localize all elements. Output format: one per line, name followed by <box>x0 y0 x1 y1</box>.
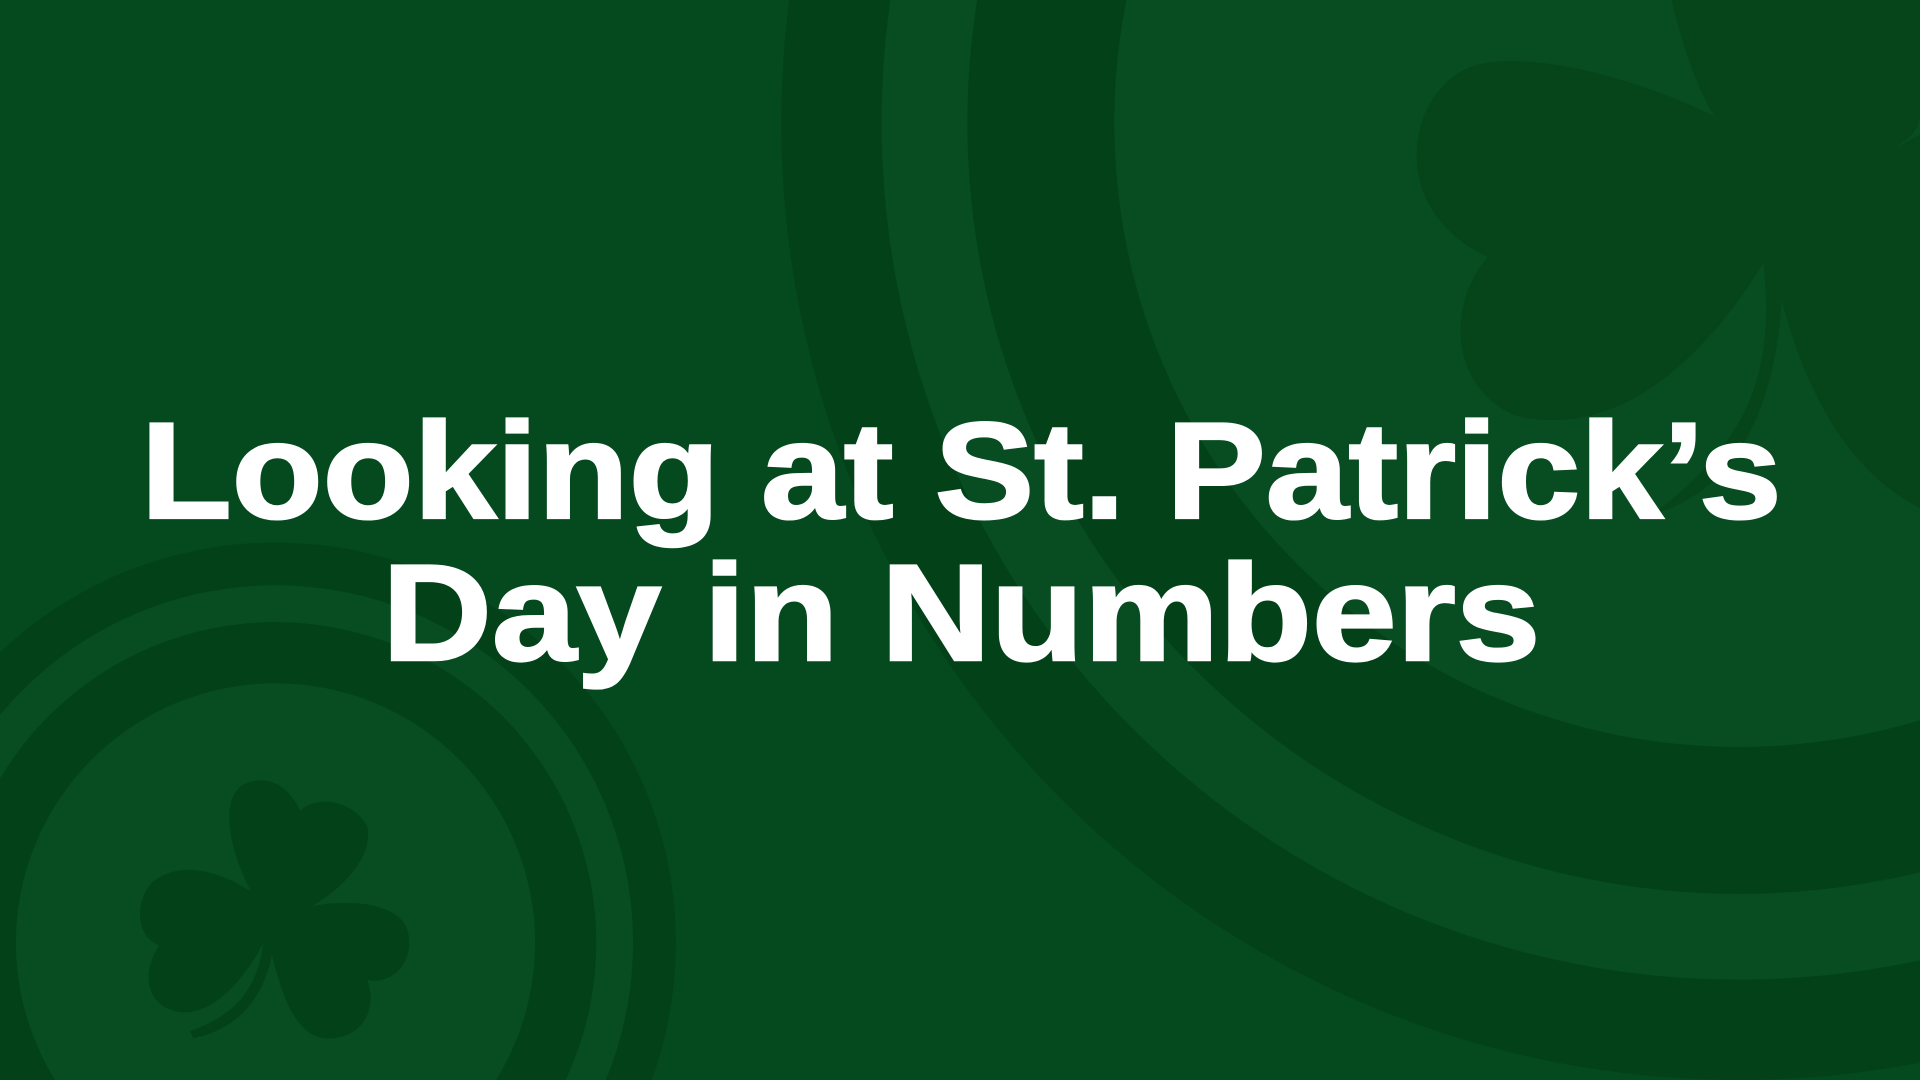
title <box>141 395 1782 690</box>
icon: small shamrock <box>140 780 409 1039</box>
big concentric circles right <box>781 0 1920 1080</box>
left concentric circles <box>0 542 676 1080</box>
title: Looking at St. Patrick’s <box>141 395 1782 548</box>
title: Day in Numbers <box>382 537 1540 690</box>
big shamrock top right <box>1417 0 1920 514</box>
